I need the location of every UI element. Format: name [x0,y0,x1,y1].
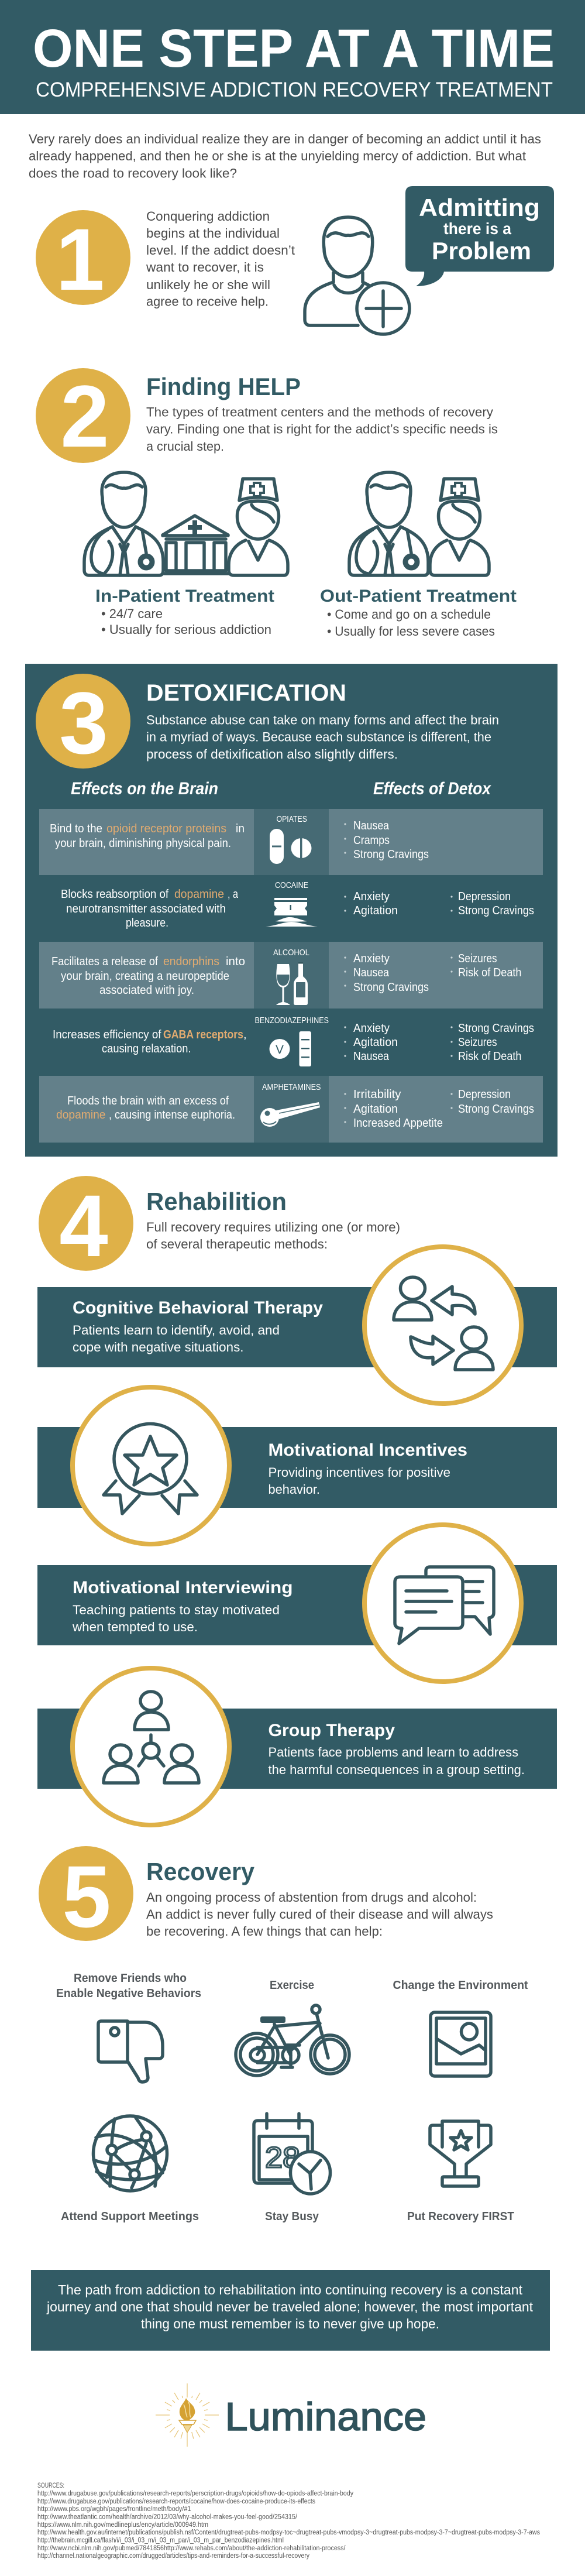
item: remove friends: Enable Negative Behaviors [56,1987,201,2000]
step 1 text: level. If the addict doesn’t [146,243,295,258]
row: opiates [39,809,543,875]
item: change the environment [393,1979,528,2076]
band: cognitive behavioral therapy: cope with negative situations. [73,1340,243,1354]
icon: group of people [73,1668,229,1825]
step 3 text: Substance abuse can take on many forms and affect the brain [146,713,499,727]
band: motivational interviewing: when tempted to use. [72,1620,198,1634]
benzodiazephines effects of detox: Risk of Death [458,1050,522,1063]
item: attend support meetings: Attend Support Meetings [61,2210,199,2223]
icon: doctor left [84,472,163,575]
step 2 text: a crucial step. [146,439,224,454]
step 4 [37,1176,557,1825]
band: group therapy [37,1709,557,1789]
opiates effect on brain: your brain, diminishing physical pain. [55,837,231,850]
band: motivational incentives: behavior. [268,1482,320,1497]
cocaine effects of detox: Depression [458,890,511,903]
sources: http://thebrain.mcgill.ca/flash/i/i_03/i_03_m/i_03_m_par/i_03_m_par_benzodiazepines.html [37,2537,284,2544]
step 3 text: in a myriad of ways. Because each substance is different, the [146,729,491,745]
step 3 text [146,713,499,762]
benzodiazephines label: BENZODIAZEPHINES [255,1016,329,1025]
item: exercise: Exercise [270,1979,314,1992]
amphetamines effects of detox: Irritability [353,1088,401,1101]
band: cognitive behavioral therapy: Patients learn to identify, avoid, and [73,1323,280,1337]
cocaine effects of detox: Anxiety [353,890,390,903]
icon: benzodiazepine pills [269,1031,311,1066]
subtitle: COMPREHENSIVE ADDICTION RECOVERY TREATMENT [36,78,553,101]
icon: person with plus [305,217,410,334]
icon: speech bubbles [364,1525,521,1682]
step 1 text: Conquering addiction [146,209,270,224]
cocaine effect on brain: Blocks reabsorption of [61,888,168,901]
alcohol effects of detox: Nausea [353,966,390,979]
benzodiazephines effects of detox: Strong Cravings [458,1022,534,1035]
icon: nurse right [430,479,489,575]
step 4 text [146,1220,400,1251]
alcohol effect on brain: your brain, creating a neuropeptide [61,970,229,983]
benzodiazephines effect on brain: Increases efficiency of [53,1028,161,1041]
band: motivational interviewing [37,1565,557,1645]
band: cognitive behavioral therapy [37,1287,557,1367]
item: stay busy [254,2114,330,2223]
logo: Luminance [156,2383,426,2447]
step 5 text: An ongoing process of abstention from drugs and alcohol: [146,1890,477,1905]
step 4 badge [39,1176,133,1275]
cocaine effects of detox: Strong Cravings [458,904,534,917]
in-patient treatment: • 24/7 care [101,606,163,621]
icon: benzodiazepine pills: V [276,1043,284,1057]
icon: pipe [260,1102,320,1127]
cocaine effect on brain: dopamine [174,888,224,901]
wordmark: Luminance [225,2395,426,2439]
step 2 text [146,405,498,454]
icon: torch with rays [156,2383,219,2447]
icon: thumbs down [98,2021,163,2082]
opiates effect on brain [50,822,245,850]
sources: http://www.health.gov.au/internet/publications/publish.nsf/Content/drugtreat-pubs-modpsy-toc~drugtreat-pubs-vmodpsy-3~drugtreat-pubs-modpsy-3-7~drugtreat-pubs-modpsy-3-7-aws [37,2529,540,2536]
icon: wine glass and bottle [276,962,308,1005]
column heading: effects of detox: Effects of Detox [373,779,491,798]
row: benzodiazephines [53,1016,534,1066]
step 5 text: An addict is never fully cured of their disease and will always [146,1907,493,1922]
alcohol effect on brain: associated with joy. [99,984,194,997]
amphetamines effects of detox: Agitation [353,1103,398,1116]
opiates effects of detox: Nausea [353,819,390,832]
step 5 badge [39,1846,133,1946]
cocaine effects of detox: Agitation [353,904,398,917]
amphetamines label: AMPHETAMINES [262,1082,321,1092]
benzodiazephines effect on brain [53,1028,247,1055]
row: amphetamines [39,1076,543,1143]
step 5 heading: Recovery [146,1858,255,1885]
alcohol effect on brain [51,955,245,997]
amphetamines effects of detox: Depression [458,1088,511,1101]
step 1 text: unlikely he or she will [146,277,270,292]
band: motivational incentives: Providing incentives for positive [268,1465,450,1480]
icon: pills [270,829,311,864]
intro text [29,132,541,180]
step 1 text: agree to receive help. [146,294,269,309]
item: change the environment: Change the Environment [393,1979,528,1992]
sources: https://www.nlm.nih.gov/medlineplus/ency/article/000949.htm [37,2522,208,2529]
cocaine label: COCAINE [275,880,308,890]
icon: globe network [94,2116,167,2191]
opiates effects of detox: Strong Cravings [353,848,429,861]
benzodiazephines effect on brain: GABA receptors [163,1028,243,1041]
alcohol effects of detox: Risk of Death [458,966,522,979]
cocaine effect on brain [61,888,239,929]
closing statement panel: thing one must remember is to never give up hope. [141,2316,439,2331]
row: alcohol [39,942,543,1009]
item: attend support meetings [61,2116,199,2223]
step 3 badge: 3 [59,674,108,772]
alcohol effect on brain: into [226,955,245,968]
benzodiazephines effect on brain: , [243,1028,247,1041]
cocaine effect on brain: , a [228,888,239,901]
step 5 text: be recovering. A few things that can help: [146,1924,383,1939]
alcohol effects of detox: Anxiety [353,952,390,965]
closing statement panel [31,2270,550,2351]
icon: trophy [430,2121,491,2186]
step 2 heading: Finding HELP [146,373,301,400]
benzodiazephines effects of detox [344,1022,534,1063]
benzodiazephines effects of detox: Nausea [353,1050,390,1063]
speech bubble: Problem [432,237,531,265]
closing statement panel: journey and one that should never be traveled alone; however, the most important [46,2299,534,2314]
item: stay busy: Stay Busy [265,2210,319,2223]
icon: calendar and clock [254,2114,330,2194]
step 2 [36,367,517,639]
sources: http://channel.nationalgeographic.com/drugged/articles/tips-and-reminders-for-a-successful-recovery [37,2553,309,2560]
sources: http://www.drugabuse.gov/publications/research-reports/cocaine/how-does-cocaine-produce-its-effects [37,2498,315,2505]
cocaine effect on brain: neurotransmitter associated with [66,903,226,915]
sources: http://www.ncbi.nlm.nih.gov/pubmed/7841856http://www.rehabs.com/about/the-addiction-rehabilitation-process/ [37,2545,346,2552]
amphetamines effects of detox [344,1088,534,1130]
step 3 badge [36,674,130,772]
cocaine effects of detox [344,890,534,917]
step 1 text: want to recover, it is [146,260,264,275]
row: cocaine [61,880,534,929]
out-patient treatment: Out-Patient Treatment [320,586,517,606]
band: motivational incentives: Motivational Incentives [268,1440,467,1460]
alcohol effects of detox [344,952,522,994]
step 1 badge [36,210,130,308]
benzodiazephines effects of detox: Seizures [458,1036,497,1049]
intro text: Very rarely does an individual realize they are in danger of becoming an addict until it has [29,132,541,146]
opiates effect on brain: Bind to the [50,822,102,835]
header banner [0,0,585,114]
in-patient treatment: • Usually for serious addiction [101,622,271,637]
icon: medal with star [73,1387,229,1544]
item: remove friends [56,1972,201,2082]
step 4 text: Full recovery requires utilizing one (or more) [146,1220,400,1234]
alcohol effects of detox: Seizures [458,952,497,965]
step 2 text: The types of treatment centers and the methods of recovery [146,405,493,419]
step 5 [39,1846,528,2223]
sources: http://www.pbs.org/wgbh/pages/frontline/meth/body/#1 [37,2506,191,2513]
icon: bicycle [236,2005,349,2076]
step 2 text: vary. Finding one that is right for the addict’s specific needs is [146,421,498,437]
speech bubble [405,186,554,286]
out-patient treatment: • Come and go on a schedule [327,607,491,622]
step 5 text [146,1890,493,1939]
opiates effects of detox [344,819,429,861]
band: motivational interviewing: Motivational Interviewing [73,1578,292,1597]
item: put recovery first [407,2121,514,2223]
step 2 badge: 2 [60,367,109,465]
panel: detoxification [25,664,558,1157]
band: motivational incentives [37,1427,557,1508]
in-patient treatment: In-Patient Treatment [95,586,274,606]
alcohol effect on brain: Facilitates a release of [51,955,158,968]
step 1 text [146,209,295,309]
amphetamines effects of detox: Strong Cravings [458,1103,534,1116]
amphetamines effect on brain: dopamine [56,1109,105,1121]
amphetamines effect on brain: Floods the brain with an excess of [67,1095,229,1107]
step 1 [36,186,554,334]
benzodiazephines effects of detox: Agitation [353,1036,398,1049]
opiates effect on brain: opioid receptor proteins [106,822,226,835]
item: put recovery first: Put Recovery FIRST [407,2210,514,2223]
speech bubble: Admitting [419,194,540,221]
icon: hospital [163,516,229,574]
step 5 badge: 5 [62,1847,111,1946]
benzodiazephines effects of detox: Anxiety [353,1022,390,1035]
alcohol effect on brain: endorphins [163,955,219,968]
amphetamines effect on brain [56,1095,235,1121]
speech bubble: there is a [443,219,511,238]
step 4 heading: Rehabilition [146,1188,287,1215]
step 1 badge: 1 [56,210,105,308]
cocaine effect on brain: pleasure. [126,917,168,929]
column heading: effects on the brain: Effects on the Brain [71,779,218,798]
band: group therapy: Patients face problems and learn to address [268,1745,518,1759]
alcohol label: ALCOHOL [273,948,309,958]
step 1 text: begins at the individual [146,226,280,241]
amphetamines effect on brain: , causing intense euphoria. [109,1109,235,1121]
out-patient treatment: • Usually for less severe cases [327,624,495,639]
icon: people exchanging arrows [364,1247,521,1404]
opiates label: OPIATES [276,814,307,824]
icon: calendar and clock: 28 [265,2141,300,2174]
sources: SOURCES: [37,2482,64,2489]
opiates effect on brain: in [236,822,245,835]
out-patient treatment [320,586,517,639]
band: motivational interviewing: Teaching patients to stay motivated [73,1603,280,1617]
step 3 heading: DETOXIFICATION [146,680,346,706]
opiates effects of detox: Cramps [353,834,390,847]
item: remove friends: Remove Friends who [74,1972,187,1985]
intro text: already happened, and then he or she is at the unyielding mercy of addiction. But what [29,149,526,163]
band: group therapy: the harmful consequences in a group setting. [268,1762,525,1777]
sources: http://www.theatlantic.com/health/archive/2012/03/why-alcohol-makes-you-feel-good/254315/ [37,2513,298,2520]
benzodiazephines effect on brain: causing relaxation. [102,1042,191,1055]
in-patient treatment [95,586,274,637]
icon: picture frame [431,2012,491,2076]
sources [37,2482,540,2560]
icon: nurse left [229,479,288,575]
band: cognitive behavioral therapy: Cognitive Behavioral Therapy [73,1298,323,1318]
step 2 badge [36,367,130,465]
band: group therapy: Group Therapy [268,1721,395,1740]
title: ONE STEP AT A TIME [33,19,555,78]
item: exercise [236,1979,349,2076]
intro text: does the road to recovery look like? [29,166,237,180]
amphetamines effects of detox: Increased Appetite [353,1117,443,1130]
closing statement panel: The path from addiction to rehabilitation into continuing recovery is a constant [58,2282,523,2297]
sources: http://www.drugabuse.gov/publications/research-reports/perscription-drugs/opioids/how-do-opiods-affect-brain-body [37,2490,353,2497]
step 4 badge: 4 [59,1176,108,1275]
alcohol effects of detox: Strong Cravings [353,981,429,994]
step 4 text: of several therapeutic methods: [146,1237,328,1251]
icon: razor and powder [266,898,318,927]
step 3 text: process of detixification also slightly differs. [146,747,398,762]
icon: doctor right [349,472,428,575]
